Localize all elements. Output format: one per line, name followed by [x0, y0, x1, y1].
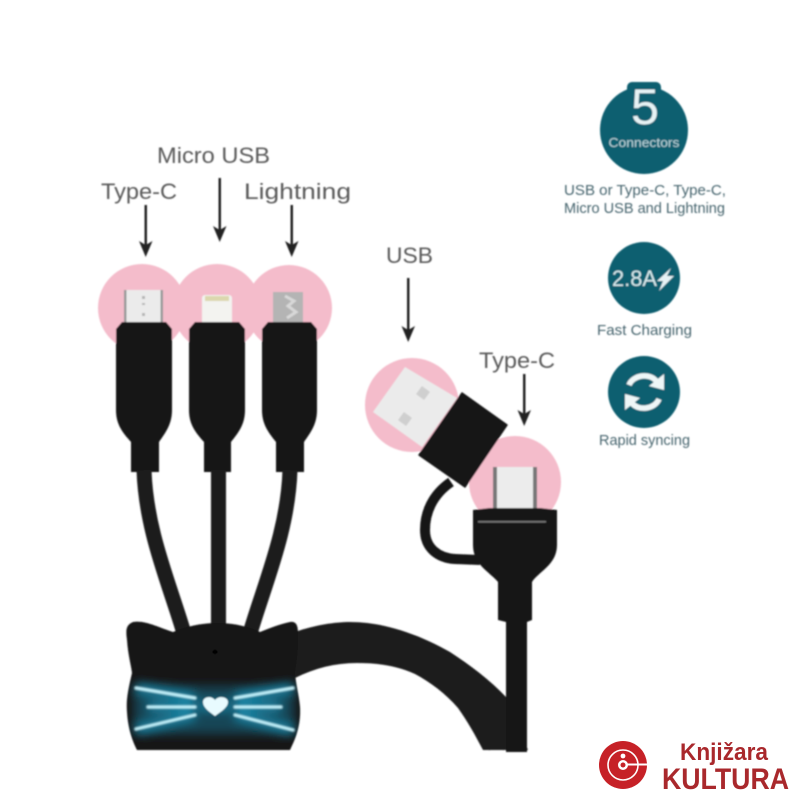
cat head: [126, 622, 300, 750]
badge: 5 connectors: 5: [631, 79, 659, 135]
text: Fast Charging: Fast Charging: [597, 323, 692, 339]
three connectors group: [98, 264, 332, 630]
whisker glow: [134, 686, 294, 734]
plug body: [473, 508, 557, 752]
arrow: Type-C: [139, 205, 152, 257]
icon: sync arrows: [625, 374, 664, 410]
arrow: Type-C right: [518, 374, 531, 426]
two-in-one connector group: [365, 358, 561, 752]
pink circle: Micro USB tip: [246, 265, 332, 351]
body seam: [478, 521, 546, 522]
label: Type-C right: Type-C: [479, 348, 555, 373]
Micro USB metal tip: [273, 292, 303, 324]
connector body right: [262, 322, 317, 472]
icon: lightning bolt: [657, 268, 674, 291]
label: Type-C: Type-C: [101, 179, 177, 204]
cable left: [144, 470, 183, 630]
connector body left: [116, 322, 172, 472]
label: Lightning: Lightning: [244, 179, 351, 204]
text: connector list: [564, 183, 726, 217]
label: USB: USB: [386, 243, 433, 268]
badge: 2.8A: 2.8A: [612, 266, 657, 291]
logo mark: [599, 741, 649, 789]
text: connector list: Micro USB and Lightning: [564, 201, 725, 217]
logo: Knjizara Kultura: [599, 739, 789, 796]
text: connector list: USB or Type-C, Type-C,: [564, 183, 726, 199]
mic dot: [212, 650, 218, 654]
badge: 5 connectors: [600, 79, 688, 174]
pink circle: Type-C: [469, 436, 561, 528]
badge: rapid syncing: [608, 356, 680, 428]
logo text top: Knjižara: [680, 739, 769, 766]
cable right: [251, 470, 290, 630]
Type-C metal tip: [124, 290, 163, 324]
badge: 2.8A: [608, 242, 680, 314]
whiskers: [136, 688, 293, 730]
Type-C tip: [493, 467, 537, 511]
thin side cable: [425, 482, 480, 560]
pink circle: Type-C: [98, 264, 186, 352]
connector body middle: [189, 322, 245, 472]
label: Micro USB: Micro USB: [157, 143, 270, 168]
text: Rapid syncing: Rapid syncing: [599, 433, 690, 449]
badge: 5 connectors: Connectors: [608, 135, 680, 150]
USB collar: [419, 393, 507, 487]
long flat cable: [295, 622, 528, 750]
arrow: Lightning: [285, 205, 298, 257]
arrow: Micro USB: [213, 178, 226, 242]
pink circle: USB: [365, 358, 459, 452]
USB plug: [373, 367, 457, 447]
heart: [203, 697, 228, 716]
cable middle: [211, 470, 226, 630]
Lightning metal tip: [202, 295, 232, 325]
pink circle: Lightning tip: [173, 264, 261, 352]
arrow: USB: [402, 278, 415, 342]
